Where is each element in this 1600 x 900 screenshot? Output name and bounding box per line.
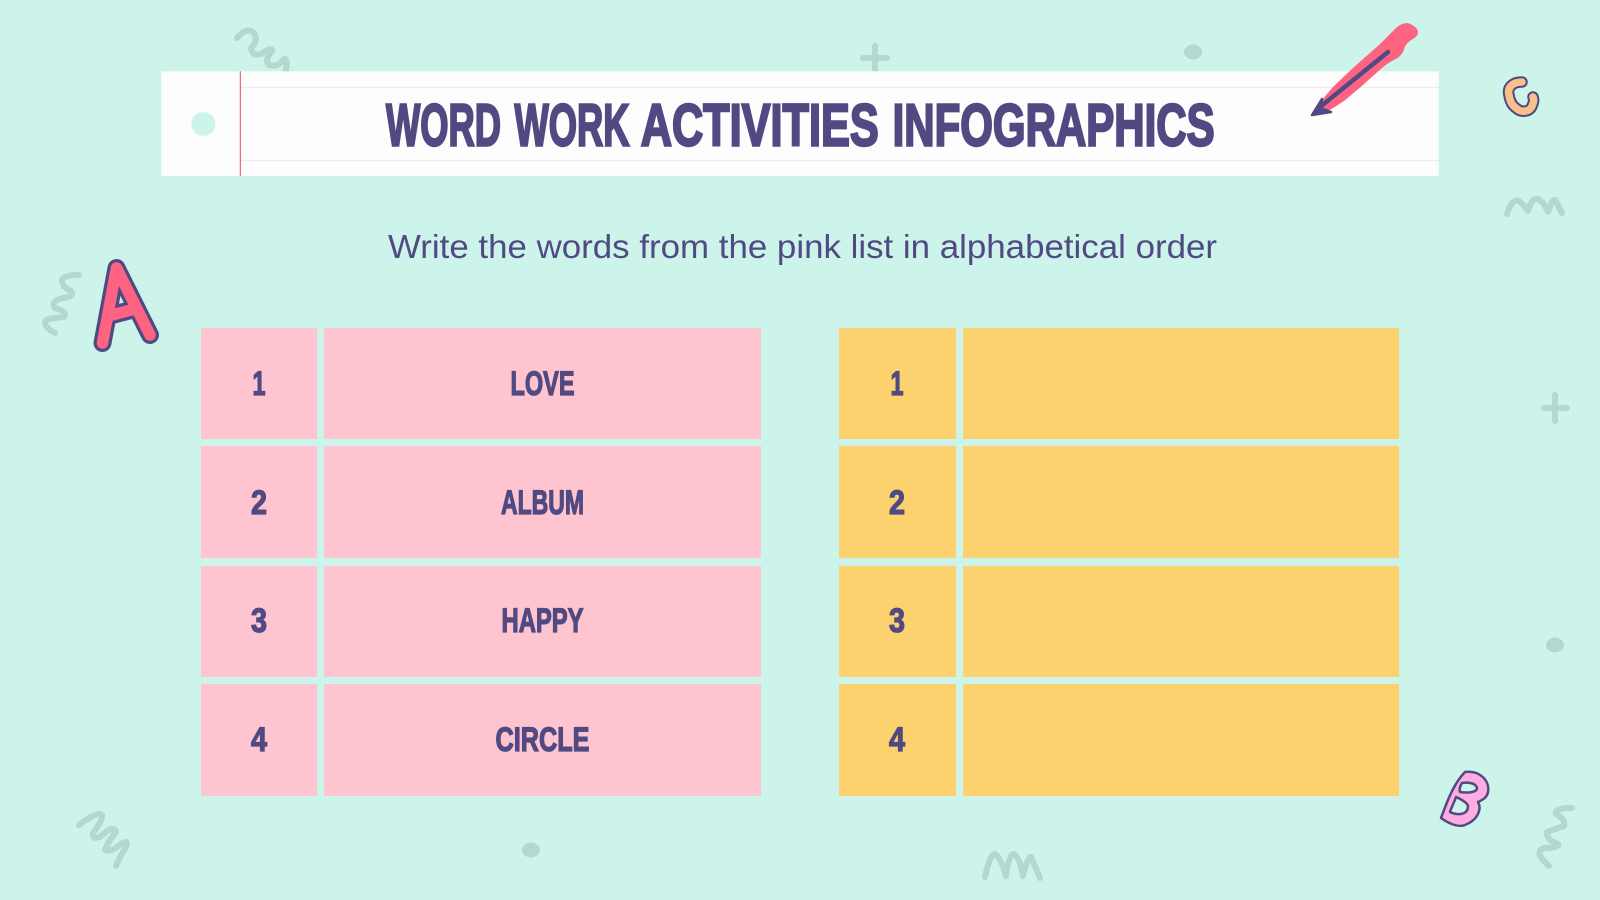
row: 3 happy: HAPPY	[502, 602, 584, 640]
row: 1 love: 1	[252, 365, 266, 403]
row: 4 circle: 4	[251, 721, 267, 759]
doodle: plus top	[863, 46, 887, 76]
doodle: squiggle bottom middle	[985, 854, 1040, 878]
doodle: dot right	[1546, 638, 1564, 652]
answer row 1	[839, 328, 1399, 439]
doodle: squiggle bottom right	[1540, 808, 1572, 866]
row: 2 album	[201, 446, 761, 558]
doodle: squiggle top left	[237, 30, 287, 74]
answer row 4	[839, 684, 1399, 796]
title: WORK	[514, 92, 630, 158]
row: 1 love	[201, 328, 761, 439]
answer row 3: 3	[889, 602, 905, 640]
answer row 1: 1	[890, 365, 904, 403]
title: WORD	[386, 92, 501, 158]
panel: yellow answer list	[839, 328, 1399, 796]
title: INFOGRAPHICS	[893, 92, 1215, 158]
answer row 2: 2	[889, 484, 905, 522]
doodle: dot bottom	[522, 842, 540, 858]
answer row 2	[839, 446, 1399, 558]
row: 3 happy	[201, 566, 761, 677]
answer row 4: 4	[889, 721, 905, 759]
doodle: dot top	[1184, 44, 1202, 60]
row: 1 love: LOVE	[510, 365, 574, 403]
doodle: squiggle top right	[1507, 199, 1562, 214]
answer row 3	[839, 566, 1399, 677]
subtitle: Write the words from the pink list in alphabetical order	[388, 228, 1217, 265]
icon: letter B	[1441, 772, 1488, 826]
doodle: plus right	[1544, 395, 1567, 421]
doodle: squiggle left	[45, 275, 79, 333]
row: 2 album: 2	[251, 484, 267, 522]
title banner: notebook paper	[161, 71, 1439, 176]
title	[386, 92, 1215, 158]
row: 4 circle: CIRCLE	[496, 721, 590, 759]
row: 3 happy: 3	[251, 602, 267, 640]
icon: pencil	[1312, 24, 1417, 115]
row: 2 album: ALBUM	[501, 484, 584, 522]
doodle: squiggle bottom left	[79, 814, 127, 866]
panel: pink word list	[201, 328, 761, 796]
title: ACTIVITIES	[641, 92, 879, 158]
icon: letter A	[102, 268, 150, 343]
icon: letter C	[1509, 82, 1534, 111]
row: 4 circle	[201, 684, 761, 796]
